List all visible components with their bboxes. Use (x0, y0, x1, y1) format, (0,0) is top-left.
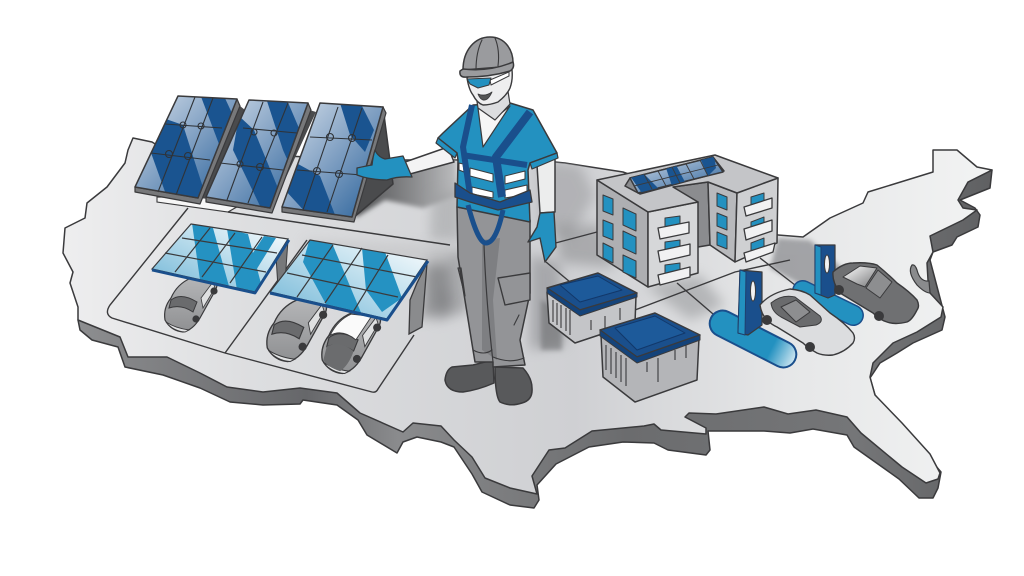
map top surface (63, 138, 992, 494)
electric sedan, front (760, 289, 854, 355)
solar panel array: ground mounted (135, 94, 393, 222)
trousers (457, 207, 530, 367)
blue shirt with reflective vest (436, 103, 558, 222)
Long Island (910, 265, 930, 293)
electric sedan, rear (833, 263, 918, 324)
safety glasses (467, 72, 509, 88)
map extrusion: side wall of the US (78, 170, 992, 508)
windows, west wing (603, 193, 764, 279)
solar panel 2 (206, 98, 311, 213)
rear support of solar panel (353, 107, 393, 218)
worker in hard hat and harness (357, 37, 558, 405)
parking lot lines (107, 208, 795, 392)
balconies (658, 198, 775, 285)
battery storage unit, rear (547, 273, 637, 343)
boots (445, 360, 532, 405)
EV charger 2 with base pad (789, 245, 867, 329)
parked car under carport 2, left (267, 300, 327, 362)
solar panel 3 (282, 103, 386, 222)
right arm (537, 158, 555, 213)
left glove (357, 150, 412, 180)
head and face (467, 66, 512, 120)
illustration: worker presenting clean energy across US map (62, 36, 993, 509)
rooftop solar array (625, 155, 724, 196)
solar panel 1 (135, 94, 242, 204)
ground strip under panels (157, 197, 242, 212)
safety harness (455, 105, 532, 243)
EV charger 1 with base pad (705, 270, 801, 372)
parked car under carport 2, right (322, 313, 381, 373)
battery storage unit, front (600, 313, 700, 402)
right glove (528, 212, 556, 262)
solar carport 2 (270, 238, 428, 334)
solar carport 1 (152, 223, 289, 295)
apartment building with rooftop solar (597, 155, 778, 287)
parked car under carport 1 (165, 278, 218, 332)
hard hat (460, 37, 514, 77)
cast shadows on the map (305, 160, 850, 350)
left arm extended (405, 147, 454, 174)
